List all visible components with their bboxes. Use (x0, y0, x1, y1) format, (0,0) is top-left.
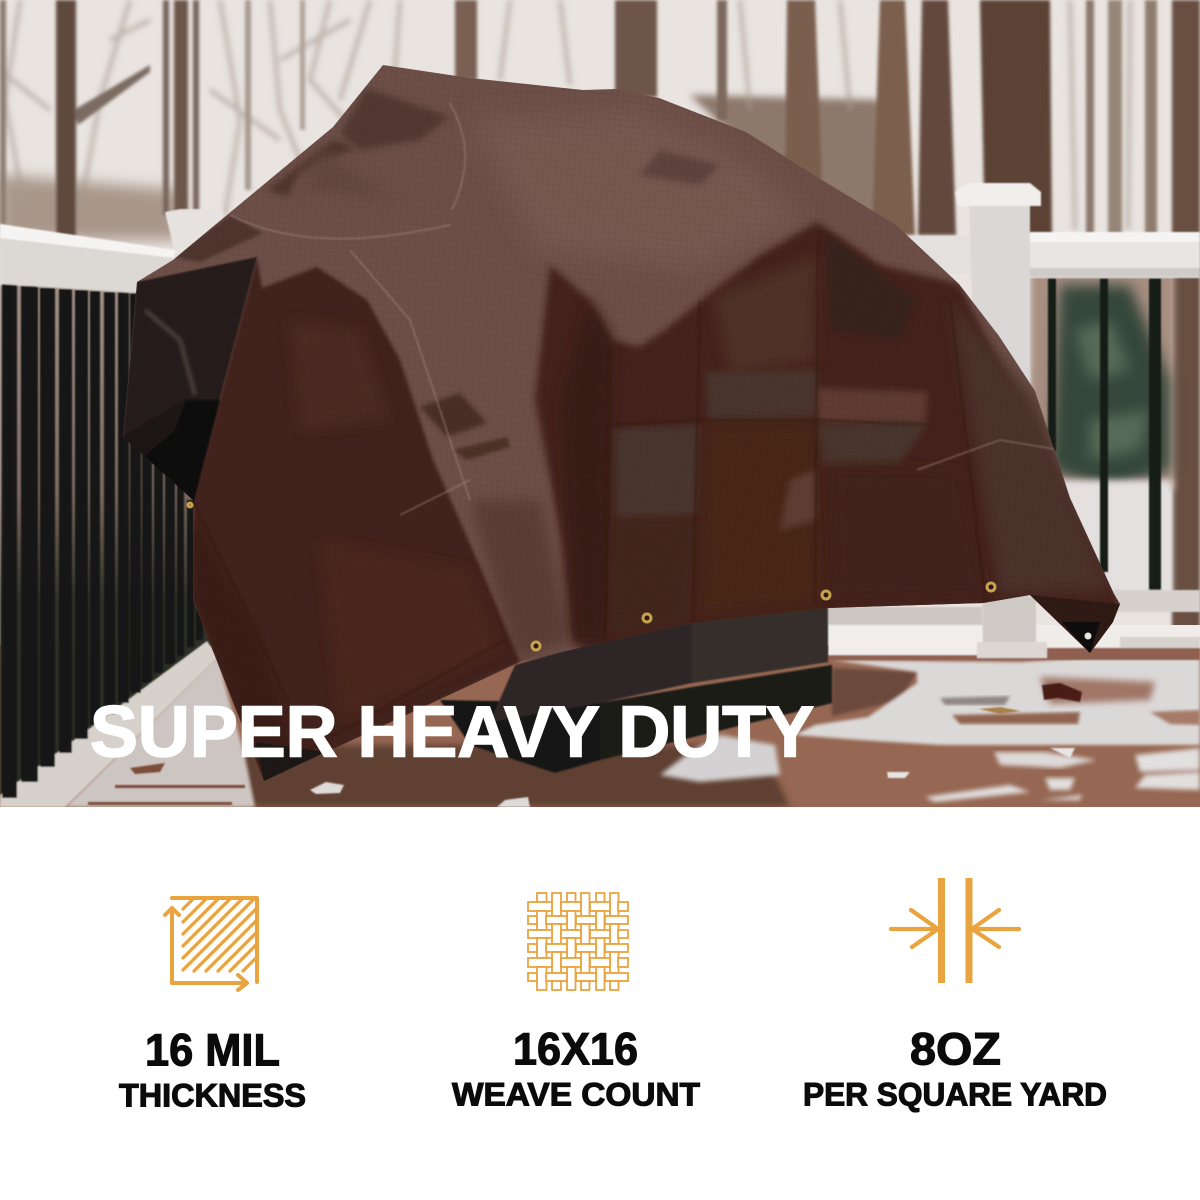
deck left dark section (240, 745, 790, 807)
tarp front mottling (718, 262, 816, 370)
stat: thickness (119, 1024, 306, 1114)
grommets (188, 503, 995, 650)
sky background (0, 0, 1200, 660)
leaf (1042, 683, 1082, 702)
tarp dark left panel (193, 258, 520, 785)
tarp bottom left corner (256, 742, 325, 781)
icon: weave (528, 893, 628, 990)
dark box base (440, 605, 832, 773)
tarp fold flap (123, 257, 257, 500)
corner eyelet (1084, 632, 1092, 640)
tarp weave texture (148, 68, 1036, 660)
stat value: 16x16: 16X16 (513, 1024, 638, 1074)
stat: weave count: WEAVE COUNT (452, 1076, 700, 1112)
deck snow large band (795, 650, 1200, 745)
right railing (828, 183, 1200, 660)
stat: thickness: THICKNESS (119, 1078, 306, 1114)
tarp dark front body (535, 222, 1120, 660)
stat value: 8oz: 8OZ (910, 1024, 1001, 1074)
stat: weight (803, 1024, 1107, 1112)
left railing (0, 209, 223, 807)
stat value: 16 mil: 16 MIL (145, 1024, 280, 1076)
heading: SUPER HEAVY DUTY (90, 692, 814, 772)
tarp top highlights and creases (494, 121, 776, 258)
tarp (100, 50, 1140, 800)
tarp corner flap bottom right (1030, 595, 1120, 653)
background behind left railing (0, 285, 212, 800)
stat: weave count (452, 1024, 700, 1112)
stat: weight: PER SQUARE YARD (803, 1076, 1107, 1112)
background hedge and snowy lawn (1030, 270, 1175, 600)
tarp seam lines (193, 240, 985, 781)
icon: thickness (165, 898, 257, 990)
deck boards (0, 625, 1200, 810)
background trees (0, 0, 1200, 640)
photo: tarp-covered item on snowy deck (0, 0, 1200, 810)
deck right brown patch (832, 668, 917, 716)
deck left snow (65, 655, 255, 807)
icon: weight compression arrows (891, 878, 1019, 983)
